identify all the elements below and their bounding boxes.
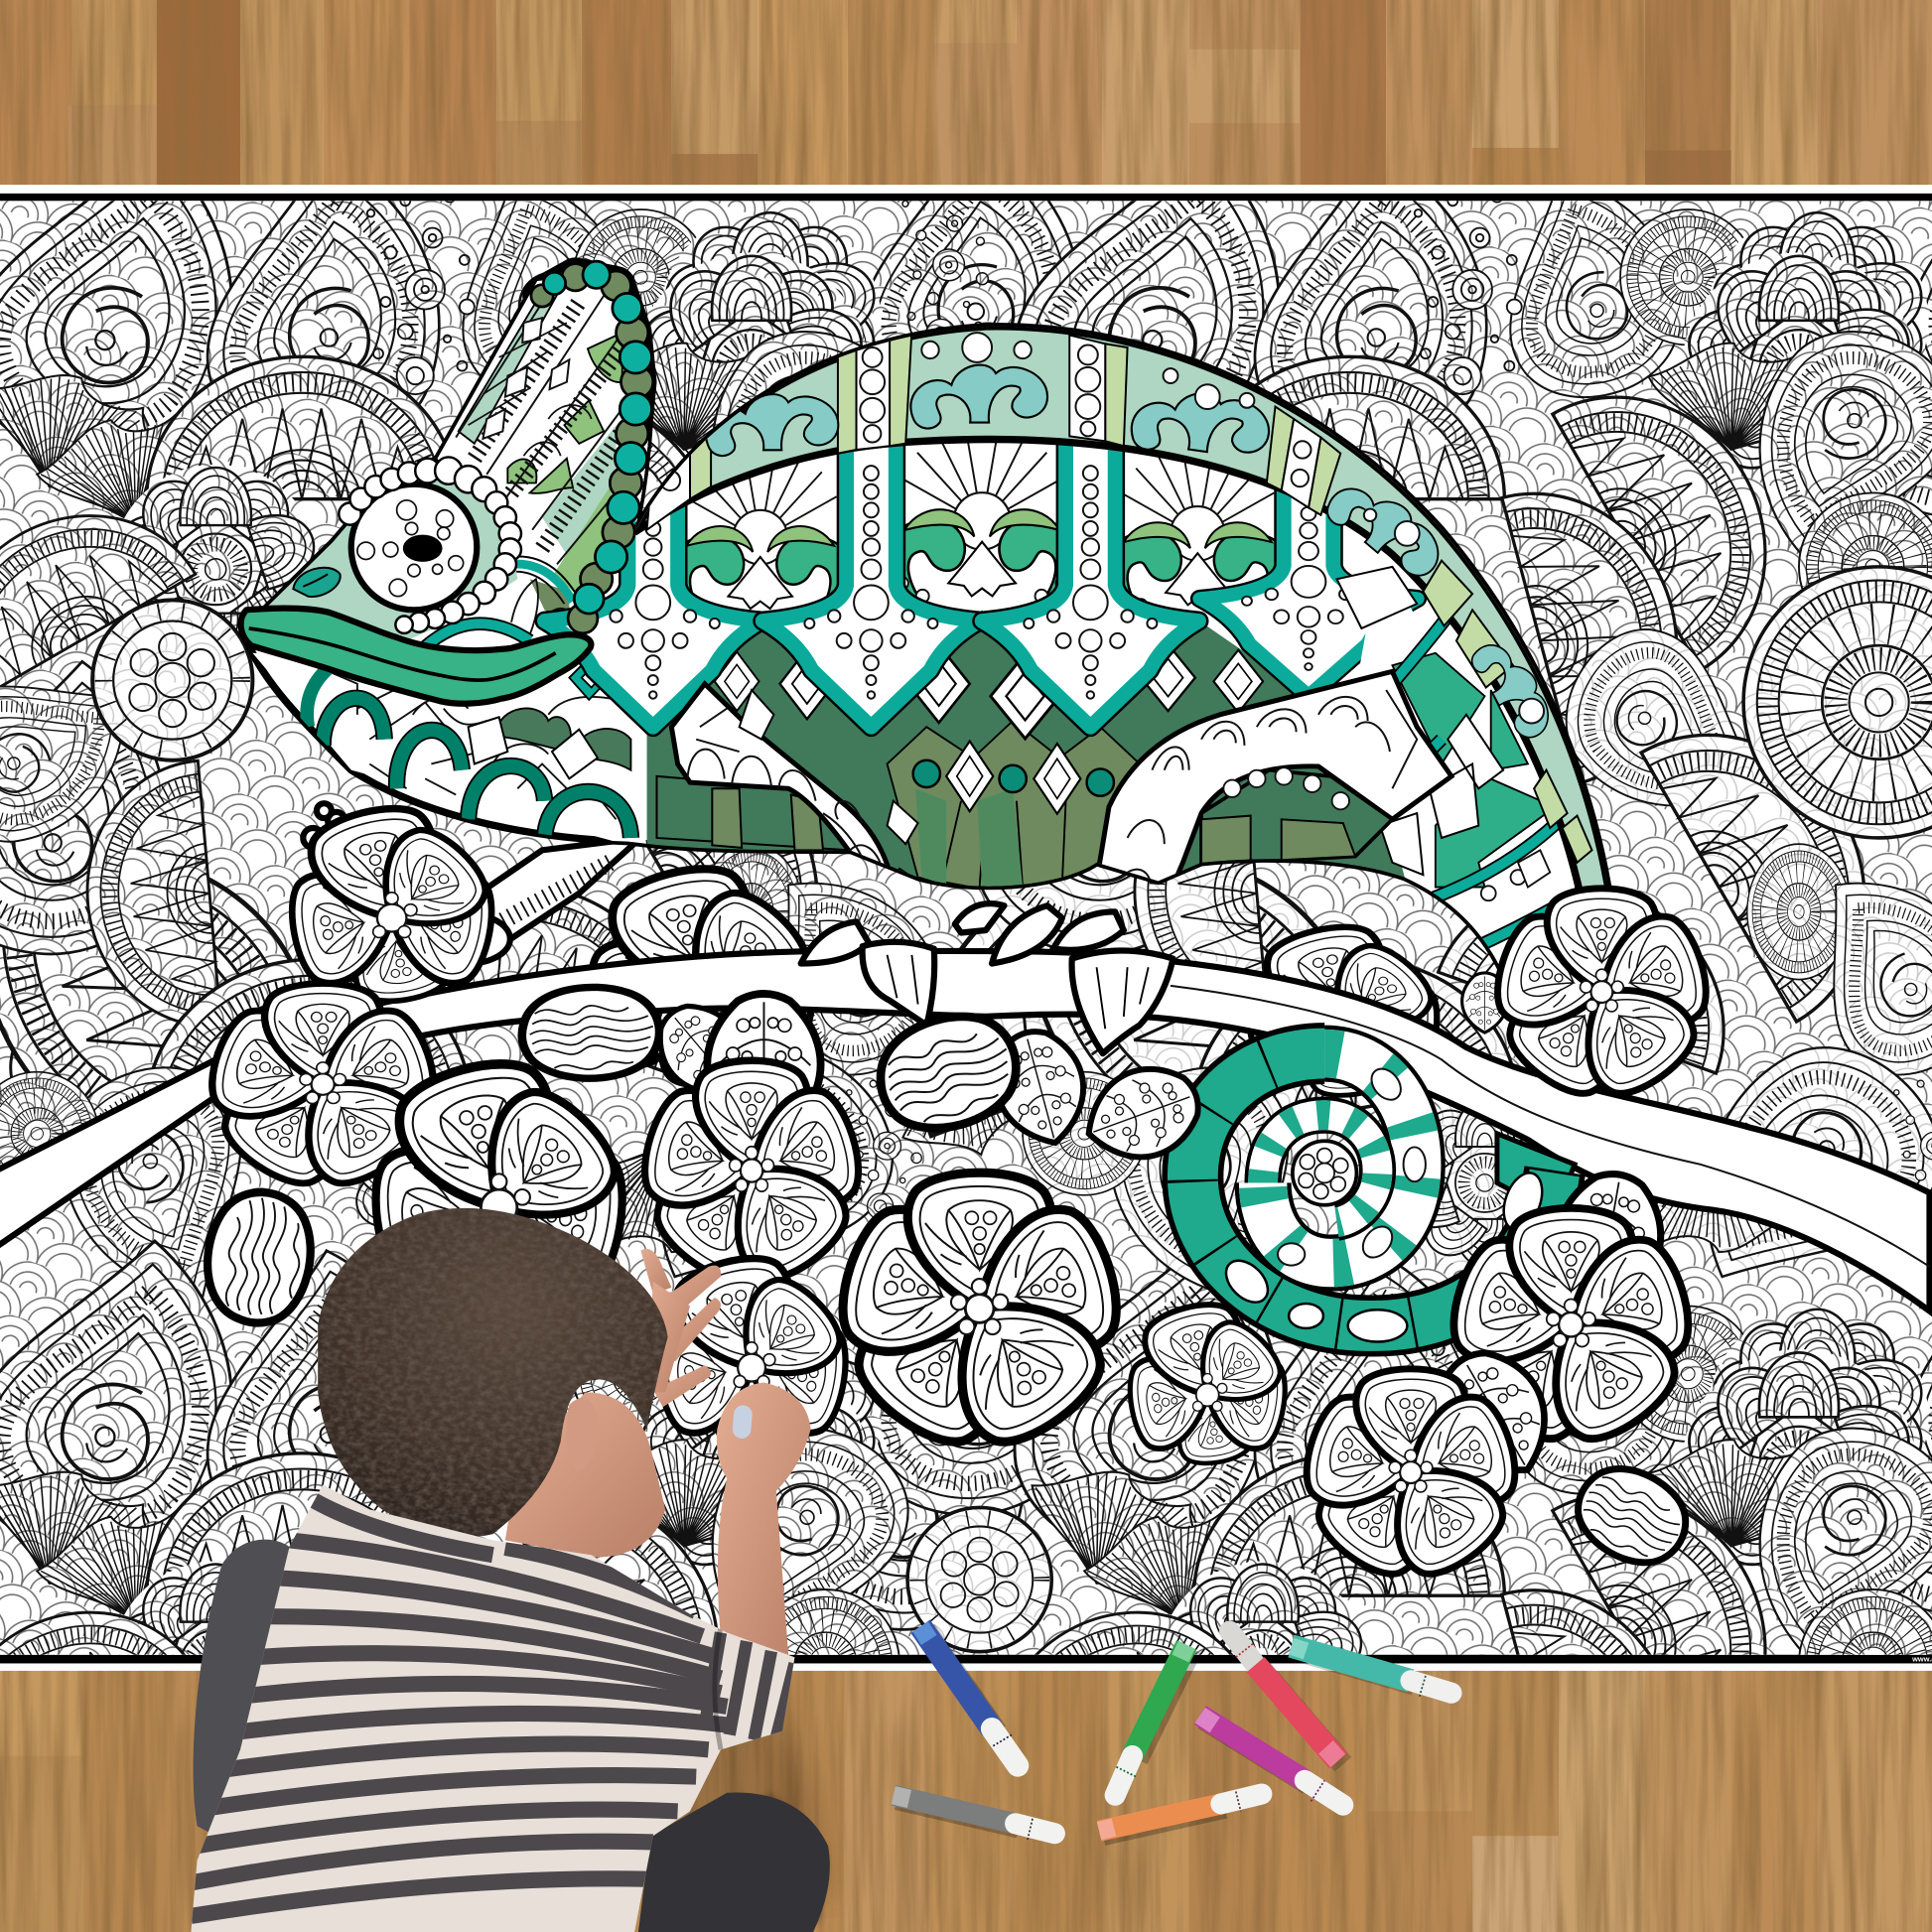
boy neck and face — [505, 1392, 665, 1558]
crest black outer line — [542, 277, 637, 619]
right flank triangles — [1335, 566, 1606, 965]
chameleon body silhouette — [242, 265, 1616, 1004]
floor: upper wood planks — [0, 0, 1932, 185]
lower body dark green field — [647, 610, 1430, 890]
tail tip — [1293, 1141, 1356, 1205]
white bead pillars in band — [857, 333, 1105, 450]
boy knee — [194, 1540, 293, 1836]
marker in hand — [742, 1415, 743, 1430]
boy striped shirt — [185, 1478, 801, 1932]
eye — [351, 484, 477, 610]
tail outer segment bars — [1192, 1053, 1555, 1325]
far front leg — [425, 838, 640, 964]
lower jaw and throat — [252, 653, 647, 850]
tail spiral — [1192, 1053, 1575, 1342]
stamen balls — [303, 803, 348, 849]
neck scales — [421, 556, 576, 645]
hair texture — [318, 1208, 668, 1537]
marker: orange — [1099, 1792, 1262, 1835]
legs on the body — [655, 669, 1455, 882]
head panel — [268, 481, 518, 639]
nostril — [293, 568, 341, 597]
marker: grey — [894, 1795, 1054, 1840]
boy drawing arm — [717, 1382, 811, 1657]
body pattern clipped to silhouette — [242, 274, 1620, 1004]
brow beads — [339, 457, 521, 633]
marker: blue — [920, 1626, 1018, 1765]
tail white ovals — [1218, 1168, 1549, 1342]
branch — [0, 951, 1930, 1311]
tail second coil — [1263, 1053, 1417, 1263]
boy ear — [566, 1398, 598, 1472]
teal scrolls — [706, 394, 838, 456]
floor: lower wood planks — [0, 1663, 1932, 1932]
chameleon — [241, 261, 1620, 1004]
boy hand raised fingers — [640, 1249, 721, 1407]
marker: teal — [1292, 1646, 1451, 1697]
boy shadow — [653, 1793, 826, 1922]
tail root — [1497, 1134, 1575, 1213]
lips — [241, 609, 591, 704]
marker: magenta — [1200, 1716, 1343, 1805]
crest beads — [531, 261, 653, 633]
photo: boy colouring — [185, 1208, 838, 1932]
teal scalloped pillars — [545, 424, 1417, 727]
boy trousers — [638, 1793, 830, 1932]
arched panels with green scrolls — [634, 433, 1620, 684]
casque panel — [437, 280, 641, 592]
marker: red — [1230, 1631, 1343, 1764]
claws of the feet — [801, 903, 1173, 1053]
band stripes — [690, 331, 1591, 863]
back band — [634, 326, 1608, 888]
boy hair — [318, 1208, 668, 1537]
foreground flowers — [198, 798, 1718, 1588]
marker: green — [1115, 1645, 1191, 1795]
tail inner coil — [1263, 1115, 1378, 1222]
flowers behind branch — [582, 857, 1507, 1101]
tail coils base — [1192, 1053, 1555, 1325]
floor shadow beside boy — [209, 1688, 838, 1897]
poster paper edges and black border — [0, 185, 1932, 1671]
